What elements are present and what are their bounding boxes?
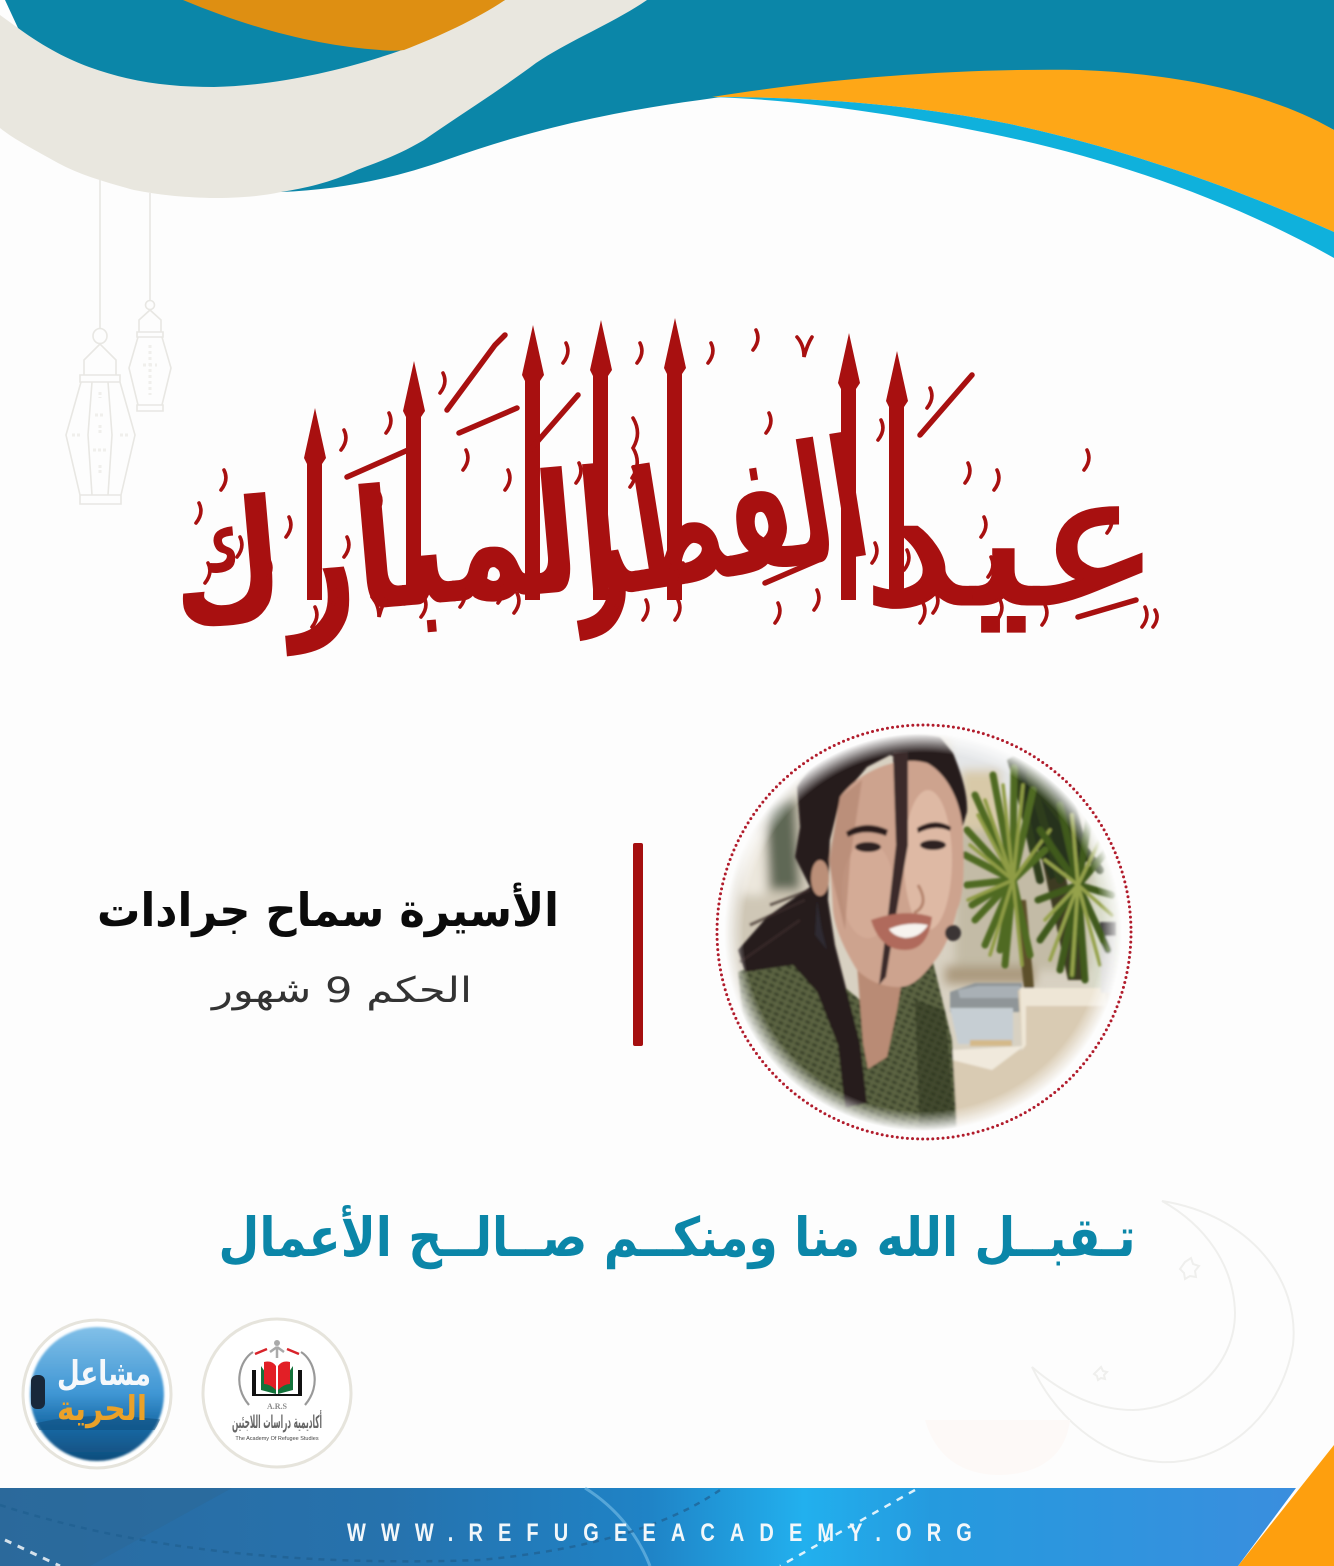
tall risers of the script: ا — [288, 228, 342, 695]
small lantern — [129, 193, 171, 411]
person above book — [274, 1340, 280, 1346]
dark orange wave — [183, 0, 505, 51]
palm fronds green — [965, 768, 1045, 965]
palm trunks — [1018, 898, 1036, 990]
tall risers of the script: ا — [648, 228, 702, 695]
sentence text: الحكم 9 شهور — [210, 971, 472, 1011]
tall risers of the script: ا — [822, 228, 876, 695]
flag arcs — [255, 1349, 299, 1354]
prisoner name: الأسيرة سماح جرادات — [97, 882, 559, 937]
word: المبارك: المبارك — [163, 434, 628, 665]
palm fronds dark — [1015, 760, 1100, 880]
vertical divider bar — [633, 843, 643, 1046]
orange corner — [1238, 1445, 1334, 1566]
hair — [738, 734, 967, 1108]
calligraphy heading: عيد الفطر المبارك — [182, 318, 1159, 656]
word: الفطر: الفطر — [550, 403, 880, 641]
teal wave — [5, 0, 1334, 192]
large lantern — [66, 180, 135, 504]
eyes — [855, 842, 881, 852]
hair wisps — [740, 890, 810, 962]
cream wave — [0, 0, 647, 198]
light blue wave — [712, 97, 1334, 258]
logo: academy of refugee studies: أكاديمية دراسات اللاجئين — [232, 1410, 322, 1433]
decorative vowel ticks — [196, 330, 1157, 627]
face — [830, 761, 964, 987]
hair strand — [879, 752, 908, 985]
dotted ring — [717, 725, 1131, 1139]
sweater — [738, 962, 958, 1145]
eyebrows — [846, 825, 888, 837]
top wave banner — [0, 0, 1334, 258]
logo: mashaal al-hurriya — [23, 1320, 171, 1468]
sweater shadow — [914, 1000, 954, 1124]
dark frond mass — [1007, 745, 1090, 880]
logo: mashaal al-hurriya: الحرية — [57, 1389, 147, 1429]
tall risers of the script: ا — [506, 228, 560, 695]
decorative slanted strokes — [347, 335, 1136, 617]
website url: WWW.REFUGEEACADEMY.ORG — [347, 1519, 972, 1547]
nose shade — [914, 885, 923, 913]
orange wave right — [712, 70, 1334, 232]
earrings — [814, 904, 826, 948]
crescent watermark — [925, 1201, 1294, 1475]
mouth — [871, 913, 932, 950]
tall risers of the script: ا — [870, 228, 924, 695]
word: عيد: عيد — [862, 432, 1162, 648]
hanging lanterns — [66, 180, 171, 504]
footer band — [0, 1445, 1334, 1566]
tall risers of the script — [304, 318, 908, 600]
tall risers of the script: ا — [387, 228, 441, 695]
eid greeting line: تـقبــل الله منا ومنكــم صــالــح الأعمال — [218, 1205, 1136, 1269]
academy english name: The Academy Of Refugee Studies — [235, 1436, 319, 1442]
photo — [726, 734, 1119, 1130]
logo: academy of refugee studies — [203, 1319, 351, 1467]
stone wall — [952, 990, 1095, 1120]
lamp post — [1101, 925, 1115, 993]
red pages — [264, 1362, 290, 1390]
tall risers of the script: ا — [574, 228, 628, 695]
blurred background — [738, 740, 1107, 990]
portrait photo in dotted ring — [716, 724, 1132, 1140]
A.R.S: A.R.S — [267, 1402, 288, 1411]
ear — [811, 860, 829, 896]
neck — [857, 965, 903, 1069]
cars — [950, 983, 1022, 1012]
laurel ring — [239, 1352, 315, 1405]
book covers — [252, 1370, 302, 1396]
logo: mashaal al-hurriya: مشاعل — [57, 1354, 151, 1394]
